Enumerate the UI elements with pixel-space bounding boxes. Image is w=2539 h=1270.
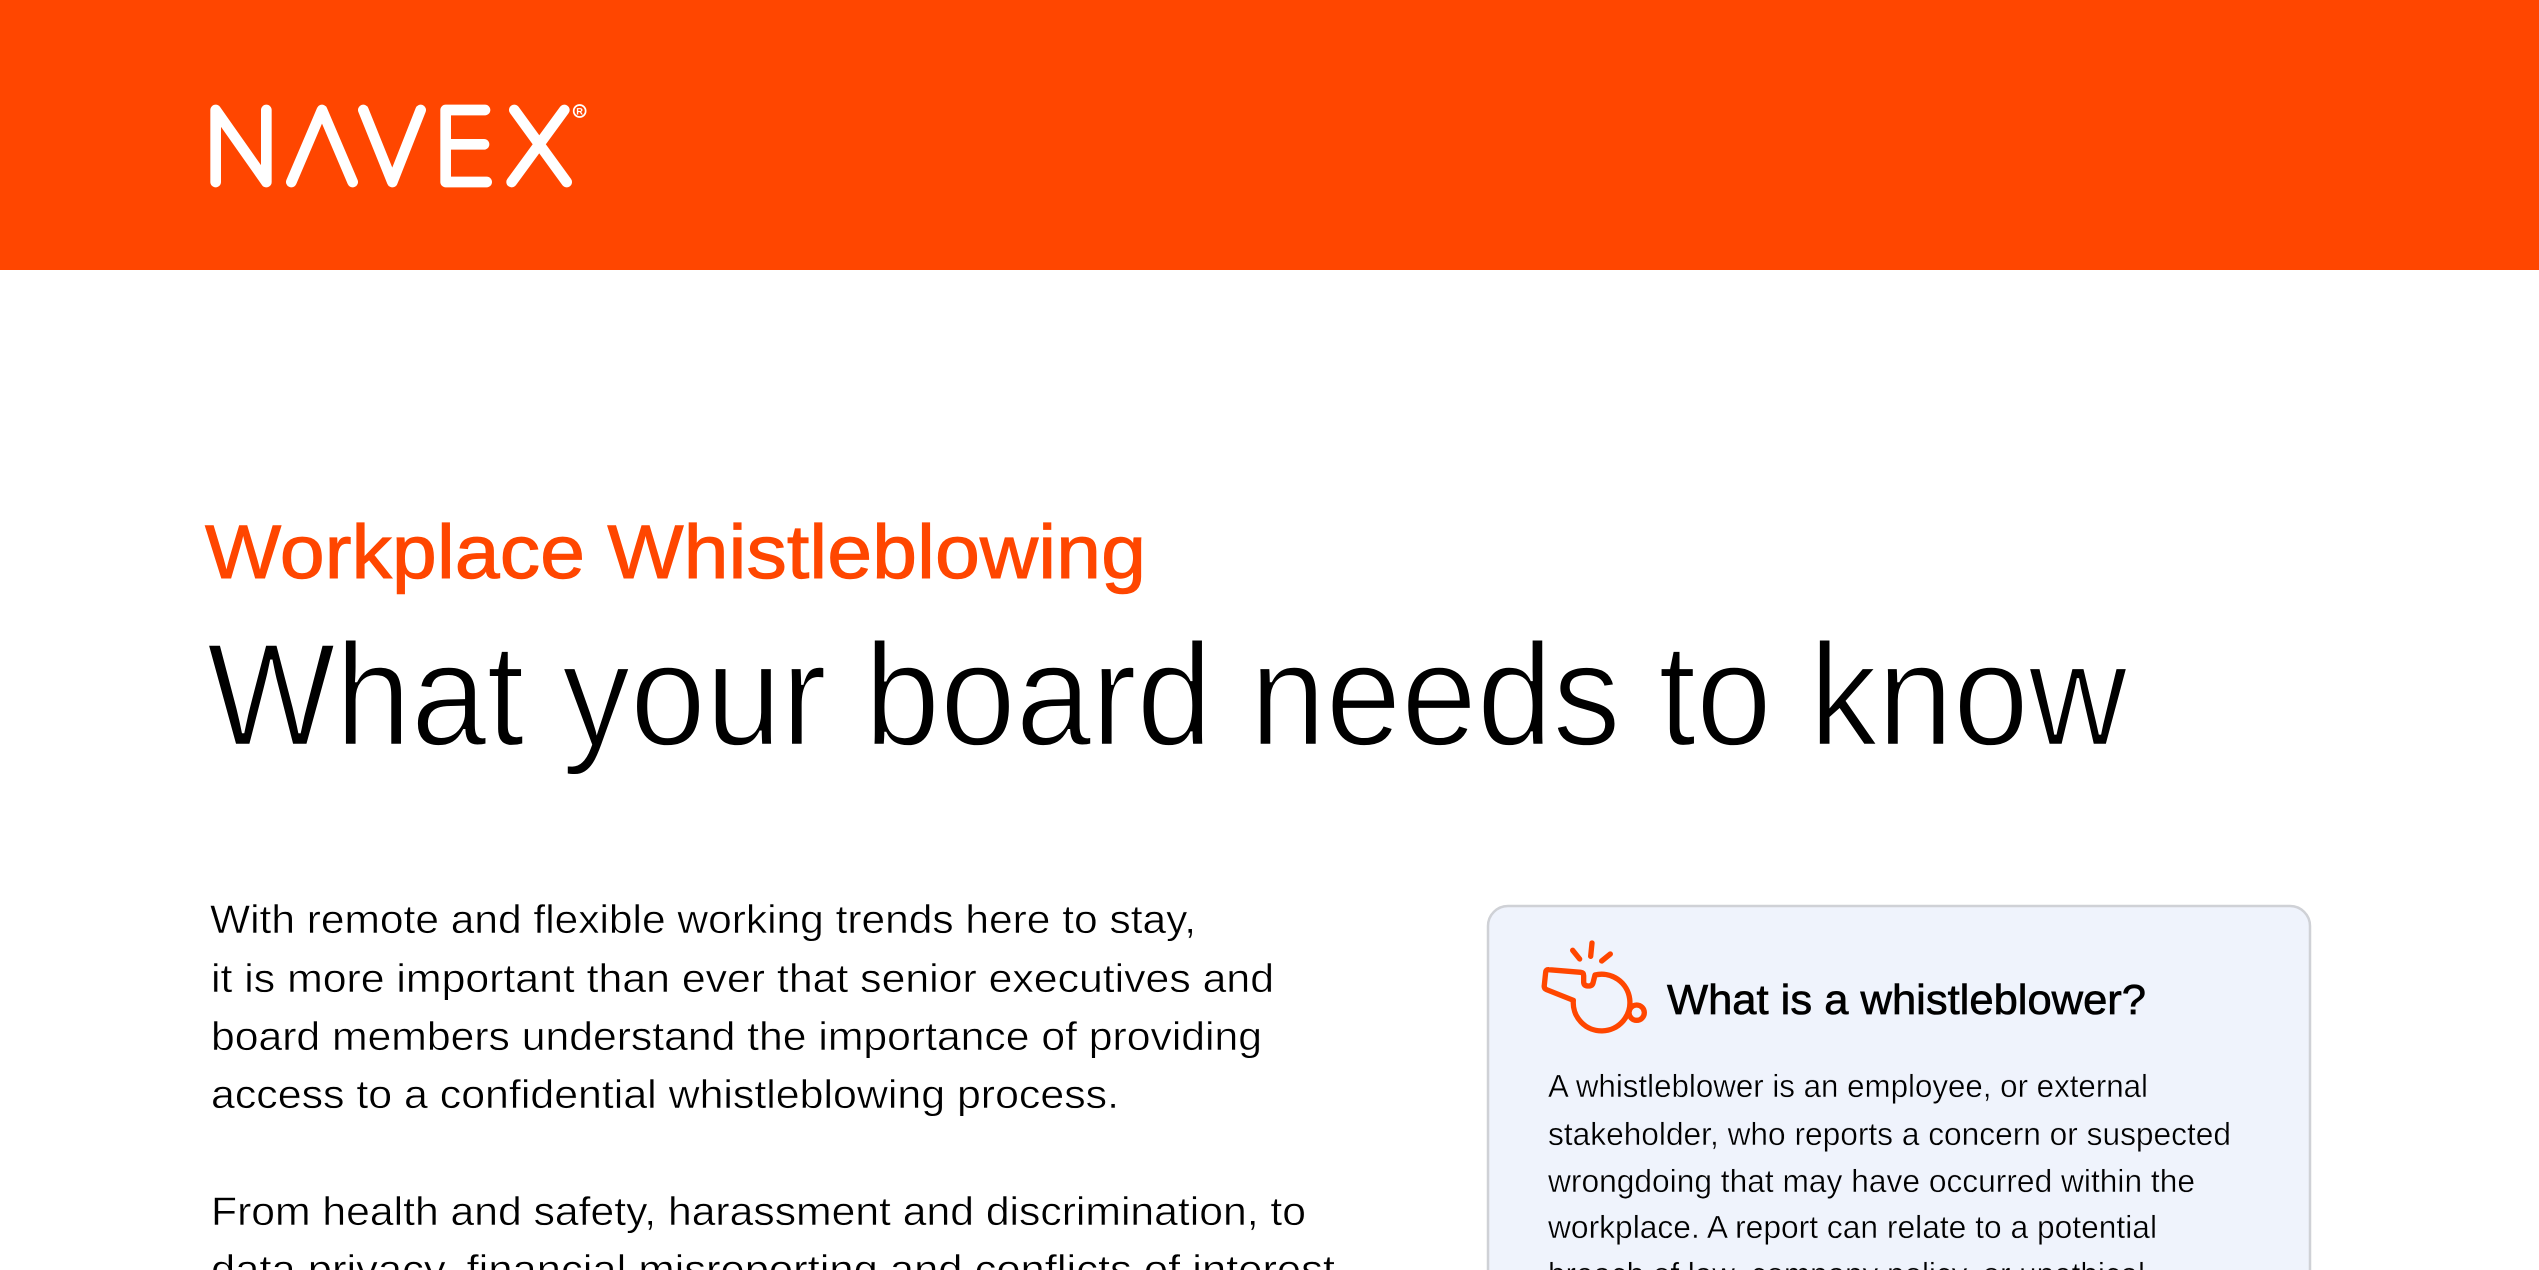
panel text: wrongdoing that may have occurred within the — [1547, 1163, 2195, 1199]
intro text: it is more important than ever that senior executives and — [211, 957, 1274, 1001]
intro text: With remote and flexible working trends here to stay, — [210, 898, 1196, 942]
icon: whistle — [1544, 943, 1644, 1031]
panel: what is a whistleblower — [1488, 906, 2310, 1270]
intro text — [210, 898, 1335, 1270]
header band — [0, 0, 2539, 270]
intro text: access to a confidential whistleblowing process. — [211, 1073, 1119, 1117]
logo: NAVEX: R — [576, 106, 583, 116]
panel text: stakeholder, who reports a concern or suspected — [1548, 1116, 2231, 1152]
panel heading: What is a whistleblower? — [1667, 976, 2146, 1023]
main title: What your board needs to know — [207, 613, 2128, 776]
panel text: workplace. A report can relate to a potential — [1547, 1209, 2157, 1245]
intro text: board members understand the importance of providing — [211, 1015, 1262, 1059]
panel text — [1547, 1068, 2231, 1270]
intro text: From health and safety, harassment and discrimination, to — [211, 1190, 1306, 1234]
logo: NAVEX — [216, 105, 586, 182]
panel text: A whistleblower is an employee, or external — [1548, 1068, 2148, 1104]
subtitle: Workplace Whistleblowing — [205, 510, 1146, 595]
